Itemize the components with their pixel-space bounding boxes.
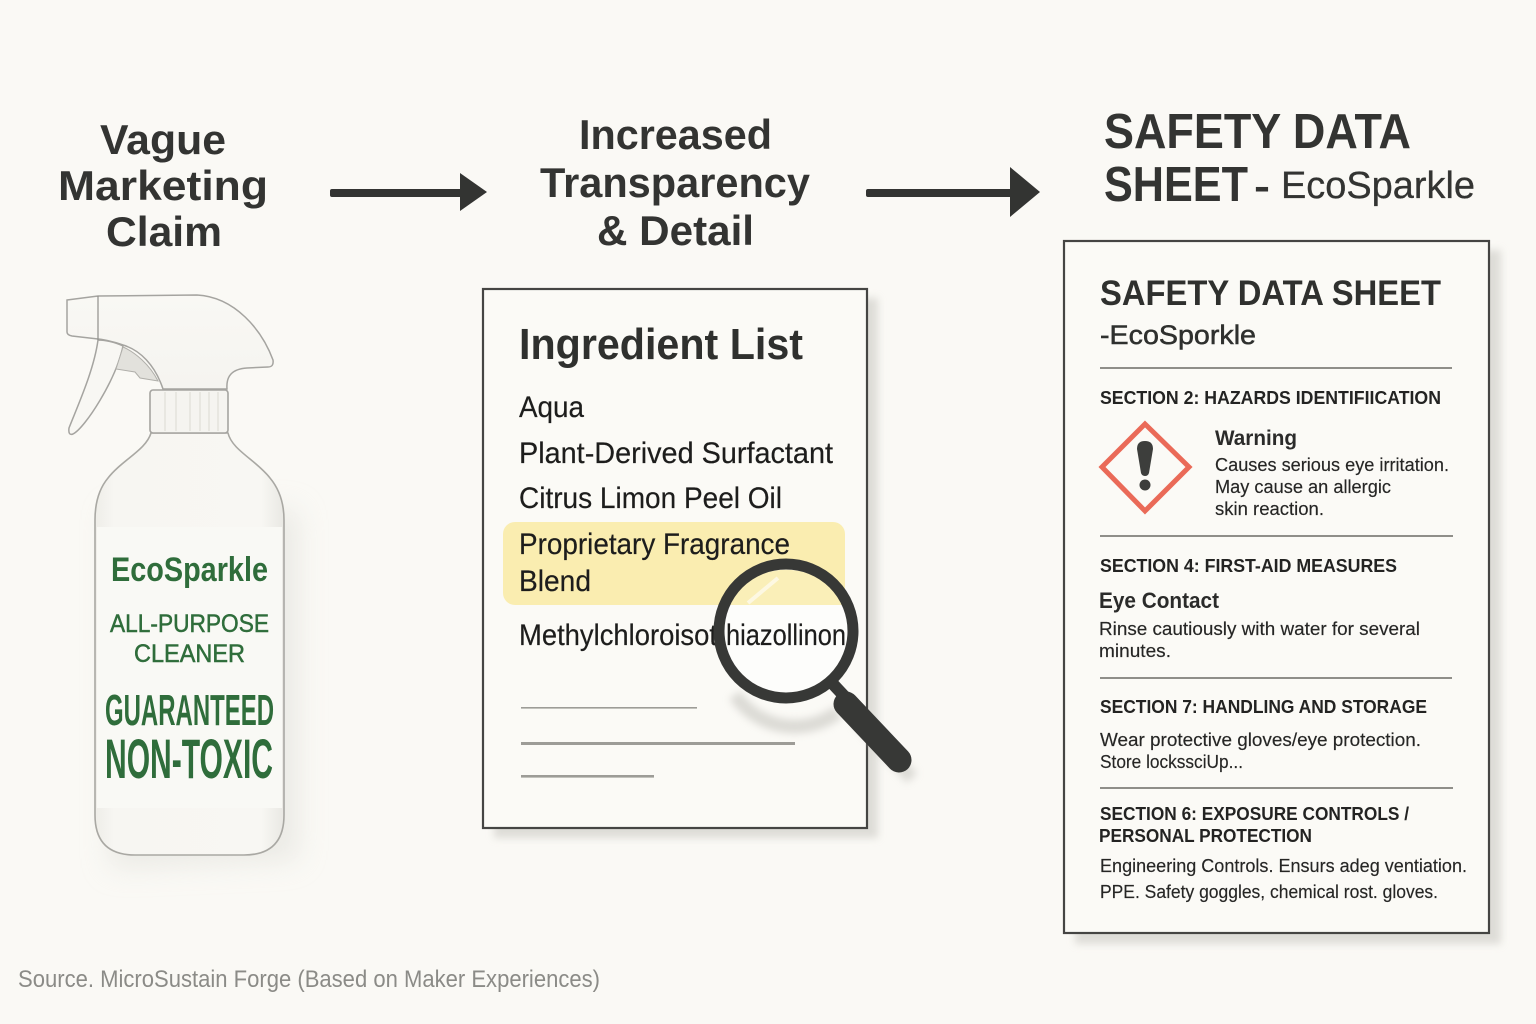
heading: vague marketing claim: Marketing bbox=[58, 162, 268, 209]
lens tint bbox=[727, 570, 845, 605]
highlight: proprietary blend bbox=[503, 522, 845, 605]
ingredient entries: Citrus Limon Peel Oil bbox=[519, 482, 782, 515]
section 7: handling and storage: Wear protective gloves/eye protection. bbox=[1100, 730, 1421, 750]
panel: safety data sheet bbox=[1064, 241, 1501, 944]
ingredient entries: Aqua bbox=[519, 391, 584, 424]
heading: safety data sheet ecosparkle: SHEET bbox=[1104, 158, 1248, 212]
heading: increased transparency and detail bbox=[540, 111, 811, 254]
section 4: first aid: Eye Contact bbox=[1099, 588, 1220, 613]
bottle label text: GUARANTEED bbox=[105, 686, 274, 735]
ingredient list title: Ingredient List bbox=[519, 320, 803, 369]
heading: safety data sheet ecosparkle: EcoSparkle bbox=[1281, 165, 1475, 207]
trigger bbox=[69, 340, 123, 434]
placeholder lines bbox=[521, 707, 795, 778]
bottle label area bbox=[97, 527, 282, 808]
sheet shadow bbox=[1075, 250, 1501, 944]
bottle label text: ALL-PURPOSE bbox=[110, 610, 269, 638]
section 6: exposure controls: Engineering Controls. Ensurs adeg ventiation. bbox=[1100, 856, 1467, 876]
section 4: first aid: minutes. bbox=[1099, 641, 1171, 661]
nozzle seam bbox=[97, 296, 99, 340]
heading: vague marketing claim: Claim bbox=[106, 208, 222, 255]
spray head bbox=[67, 295, 273, 389]
bottle label text: CLEANER bbox=[134, 640, 245, 668]
ingredient entries bbox=[519, 391, 834, 598]
lens glare bbox=[748, 578, 778, 603]
section 6: exposure controls: SECTION 6: EXPOSURE CONTROLS / bbox=[1100, 804, 1409, 824]
handle bbox=[846, 704, 899, 760]
heading: vague marketing claim: Vague bbox=[100, 116, 226, 163]
warning text bbox=[1215, 427, 1449, 519]
section 7: handling and storage: SECTION 7: HANDLING AND STORAGE bbox=[1100, 697, 1427, 717]
section 7: handling and storage bbox=[1100, 697, 1427, 772]
bottle label text: NON-TOXIC bbox=[105, 727, 273, 790]
lens bbox=[719, 564, 853, 698]
section 6: exposure controls: PERSONAL PROTECTION bbox=[1099, 826, 1312, 846]
spray bottle bbox=[67, 295, 298, 868]
heading: increased transparency and detail: Transparency bbox=[540, 159, 811, 206]
sheet title bbox=[1100, 274, 1441, 350]
ingredient entries: Proprietary Fragrance bbox=[519, 528, 790, 561]
source note: Source. MicroSustain Forge (Based on Maker Experiences) bbox=[18, 966, 600, 993]
heading: vague marketing claim bbox=[58, 116, 268, 255]
heading: increased transparency and detail: & Detail bbox=[597, 207, 754, 254]
section 7: handling and storage: Store lockssciUp... bbox=[1100, 752, 1243, 772]
warning text: Warning bbox=[1215, 427, 1297, 450]
warning text: Causes serious eye irritation. bbox=[1215, 455, 1449, 475]
ingredient outside lens: Methylchloroisot bbox=[519, 619, 718, 652]
handle neck bbox=[832, 683, 846, 698]
section 4: first aid bbox=[1099, 556, 1420, 661]
warning text: skin reaction. bbox=[1215, 499, 1324, 519]
bottle shadow bbox=[110, 510, 298, 868]
bottle label text bbox=[105, 551, 274, 790]
sheet card bbox=[1064, 241, 1489, 933]
panel shadow bbox=[494, 298, 878, 838]
panel card bbox=[483, 289, 867, 828]
icon: hazard diamond bbox=[1102, 424, 1189, 511]
magnifier shadow bbox=[735, 695, 912, 778]
magnifying glass bbox=[519, 564, 912, 778]
panel: ingredient list bbox=[483, 289, 878, 838]
magnified ingredient: hiazollinon bbox=[726, 619, 846, 652]
heading: increased transparency and detail: Increased bbox=[579, 111, 772, 158]
trigger joint bbox=[116, 347, 158, 381]
bottle collar bbox=[150, 390, 228, 433]
section 4: first aid: Rinse cautiously with water for several bbox=[1099, 619, 1420, 639]
section 6: exposure controls: PPE. Safety goggles, chemical rost. gloves. bbox=[1100, 882, 1438, 902]
ingredient entries: Plant-Derived Surfactant bbox=[519, 437, 834, 470]
section 2: hazards bbox=[1100, 388, 1449, 519]
bottle label text: EcoSparkle bbox=[111, 551, 268, 589]
heading: safety data sheet ecosparkle: - bbox=[1254, 166, 1270, 208]
arrow: detail to safety data sheet bbox=[866, 167, 1040, 217]
ingredient entries: Blend bbox=[519, 565, 591, 598]
lens ring bbox=[719, 564, 853, 698]
heading: safety data sheet ecosparkle bbox=[1104, 105, 1475, 212]
warning text: May cause an allergic bbox=[1215, 477, 1391, 497]
arrow: claim to detail bbox=[330, 173, 487, 211]
heading: safety data sheet ecosparkle: SAFETY DATA bbox=[1104, 105, 1411, 159]
section 2: hazards: SECTION 2: HAZARDS IDENTIFIICATION bbox=[1100, 388, 1441, 408]
section 4: first aid: SECTION 4: FIRST-AID MEASURES bbox=[1100, 556, 1397, 576]
bottle body bbox=[95, 433, 284, 855]
section 6: exposure controls bbox=[1099, 804, 1467, 902]
sheet title: SAFETY DATA SHEET bbox=[1100, 274, 1441, 313]
sheet title: -EcoSporkle bbox=[1100, 320, 1256, 350]
